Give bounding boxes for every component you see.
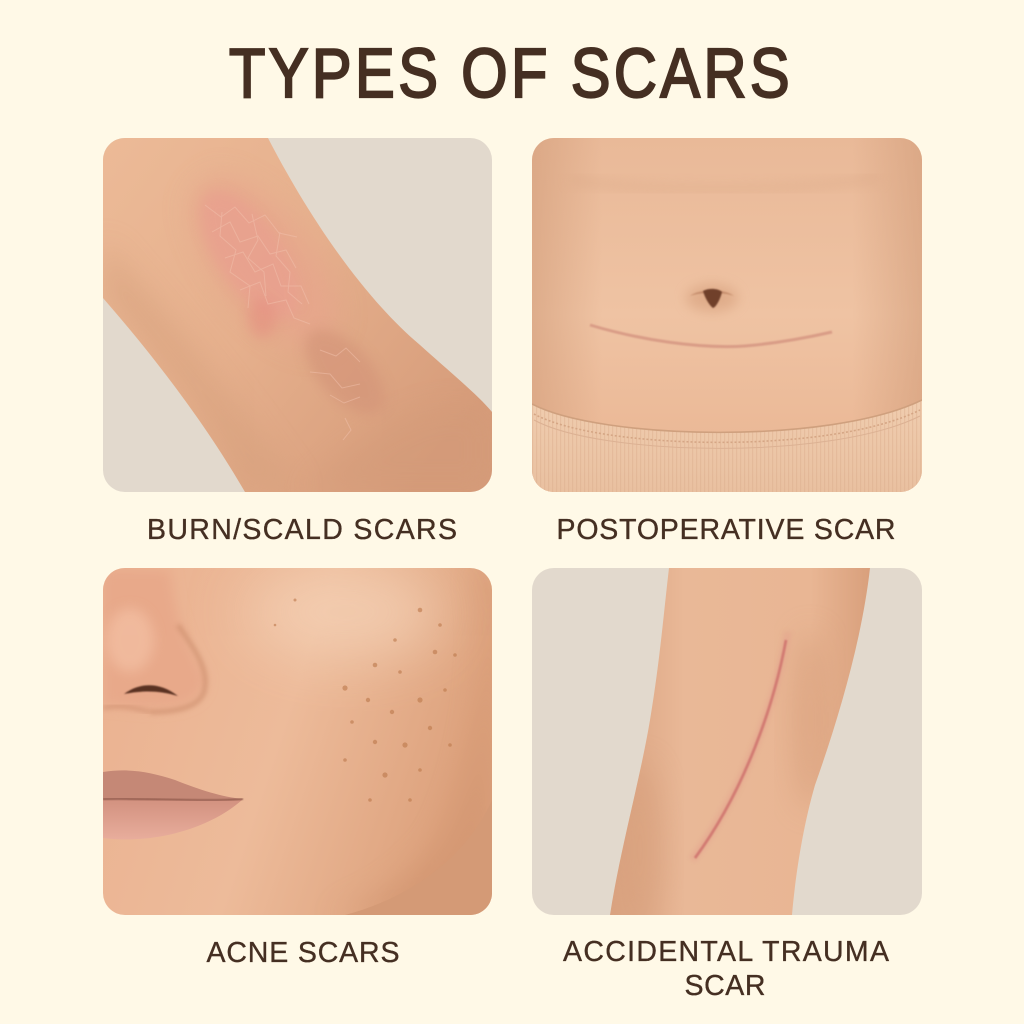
nose bbox=[103, 570, 205, 712]
forearm with burn scar bbox=[103, 138, 492, 492]
lips bbox=[103, 770, 243, 839]
label: postoperative scar: POSTOPERATIVE SCAR bbox=[556, 514, 896, 546]
panel: acne scars photo bbox=[103, 567, 492, 915]
title: TYPES OF SCARS bbox=[229, 34, 793, 112]
panel: burn/scald scars photo bbox=[103, 138, 492, 492]
label: accidental trauma scar bbox=[563, 936, 889, 1002]
label: burn/scald scars: BURN/SCALD SCARS bbox=[147, 514, 457, 546]
label: accidental trauma scar: SCAR bbox=[684, 970, 766, 1002]
label: accidental trauma scar: ACCIDENTAL TRAUMA bbox=[563, 936, 889, 968]
forearm bbox=[610, 568, 870, 915]
panel: accidental trauma scar photo bbox=[532, 568, 922, 940]
diagonal trauma scar bbox=[692, 632, 788, 860]
horizontal surgical scar bbox=[590, 325, 832, 347]
acne marks bbox=[274, 598, 457, 802]
beige underwear band bbox=[532, 400, 922, 492]
neck shadow bbox=[346, 894, 492, 915]
label: acne scars: ACNE SCARS bbox=[206, 937, 400, 969]
panel: postoperative scar photo bbox=[532, 138, 922, 492]
navel bbox=[686, 284, 738, 312]
